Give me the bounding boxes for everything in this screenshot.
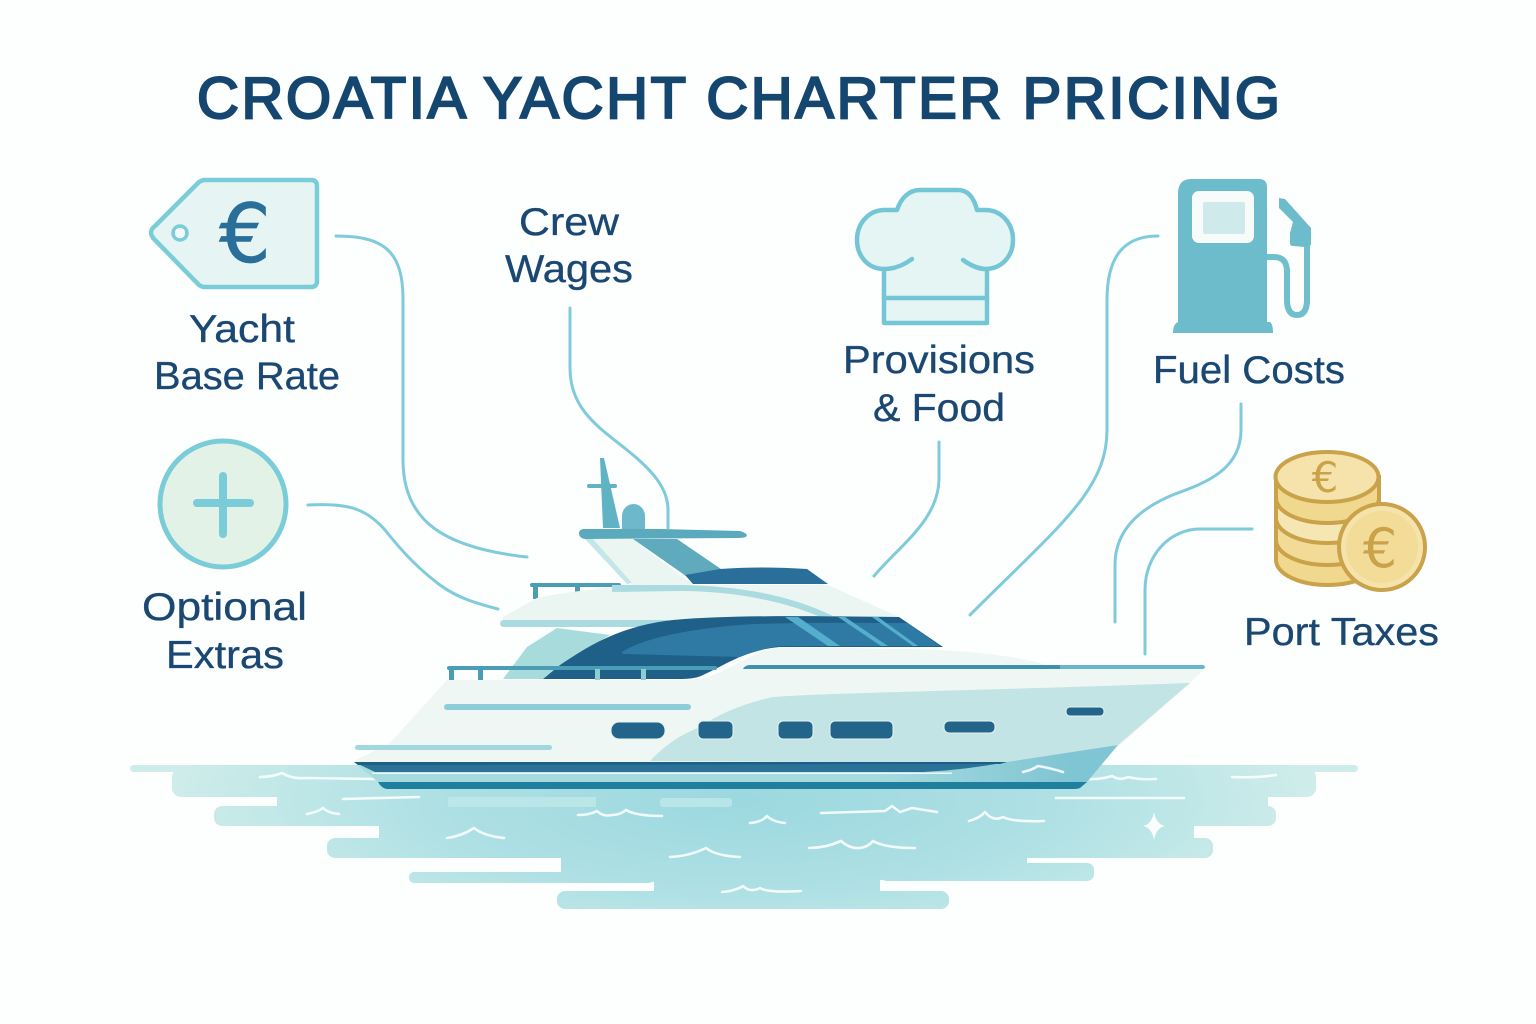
lower rail bbox=[447, 666, 717, 680]
hull side panel bbox=[650, 683, 1190, 763]
label: optional extras: Extras bbox=[166, 634, 284, 677]
label: crew wages bbox=[505, 201, 633, 291]
radar dome bbox=[622, 504, 645, 529]
label: fuel costs: Fuel Costs bbox=[1153, 349, 1345, 392]
upper cabin bbox=[585, 539, 693, 585]
label: yacht base rate: Base Rate bbox=[154, 355, 340, 398]
icon: euro coins: € bbox=[1312, 453, 1338, 502]
window reflections bbox=[785, 617, 918, 646]
rear cabin bbox=[503, 628, 610, 679]
label: provisions and food bbox=[843, 339, 1035, 430]
sparkle bbox=[1143, 812, 1165, 840]
hardtop bbox=[579, 529, 747, 539]
hull lower section bbox=[354, 745, 1118, 789]
deck stripes bbox=[355, 665, 1205, 750]
yacht bbox=[354, 458, 1207, 789]
window glass bbox=[622, 623, 940, 657]
water highlights bbox=[260, 773, 1276, 892]
icon: euro coins: € bbox=[1363, 517, 1397, 580]
label: port taxes: Port Taxes bbox=[1244, 611, 1439, 654]
label: provisions and food: & Food bbox=[873, 387, 1005, 430]
mast bbox=[587, 458, 620, 528]
label: crew wages: Wages bbox=[505, 248, 633, 291]
connectors bbox=[308, 236, 1252, 654]
main window bbox=[543, 616, 943, 679]
label: yacht base rate bbox=[154, 308, 340, 398]
upper deck bbox=[503, 585, 897, 622]
icon: fuel pump bbox=[1173, 179, 1311, 333]
hull bbox=[354, 647, 1207, 782]
label: optional extras: Optional bbox=[142, 586, 307, 629]
label: crew wages: Crew bbox=[519, 201, 619, 244]
icon: plus circle bbox=[160, 441, 286, 567]
icon: price tag bbox=[151, 180, 317, 287]
arch bbox=[633, 539, 721, 576]
icon: euro coins bbox=[1276, 452, 1425, 590]
title: CROATIA YACHT CHARTER PRICING bbox=[197, 66, 1280, 131]
deck band bbox=[500, 620, 670, 627]
label: optional extras bbox=[142, 586, 307, 677]
icon: chef hat bbox=[857, 190, 1013, 323]
upper rail bbox=[530, 583, 621, 599]
label: yacht base rate: Yacht bbox=[189, 308, 295, 351]
label: provisions and food: Provisions bbox=[843, 339, 1035, 382]
icon: price tag: € bbox=[219, 188, 271, 282]
water bbox=[130, 765, 1358, 909]
top window bbox=[685, 568, 828, 584]
portholes bbox=[611, 707, 1104, 739]
